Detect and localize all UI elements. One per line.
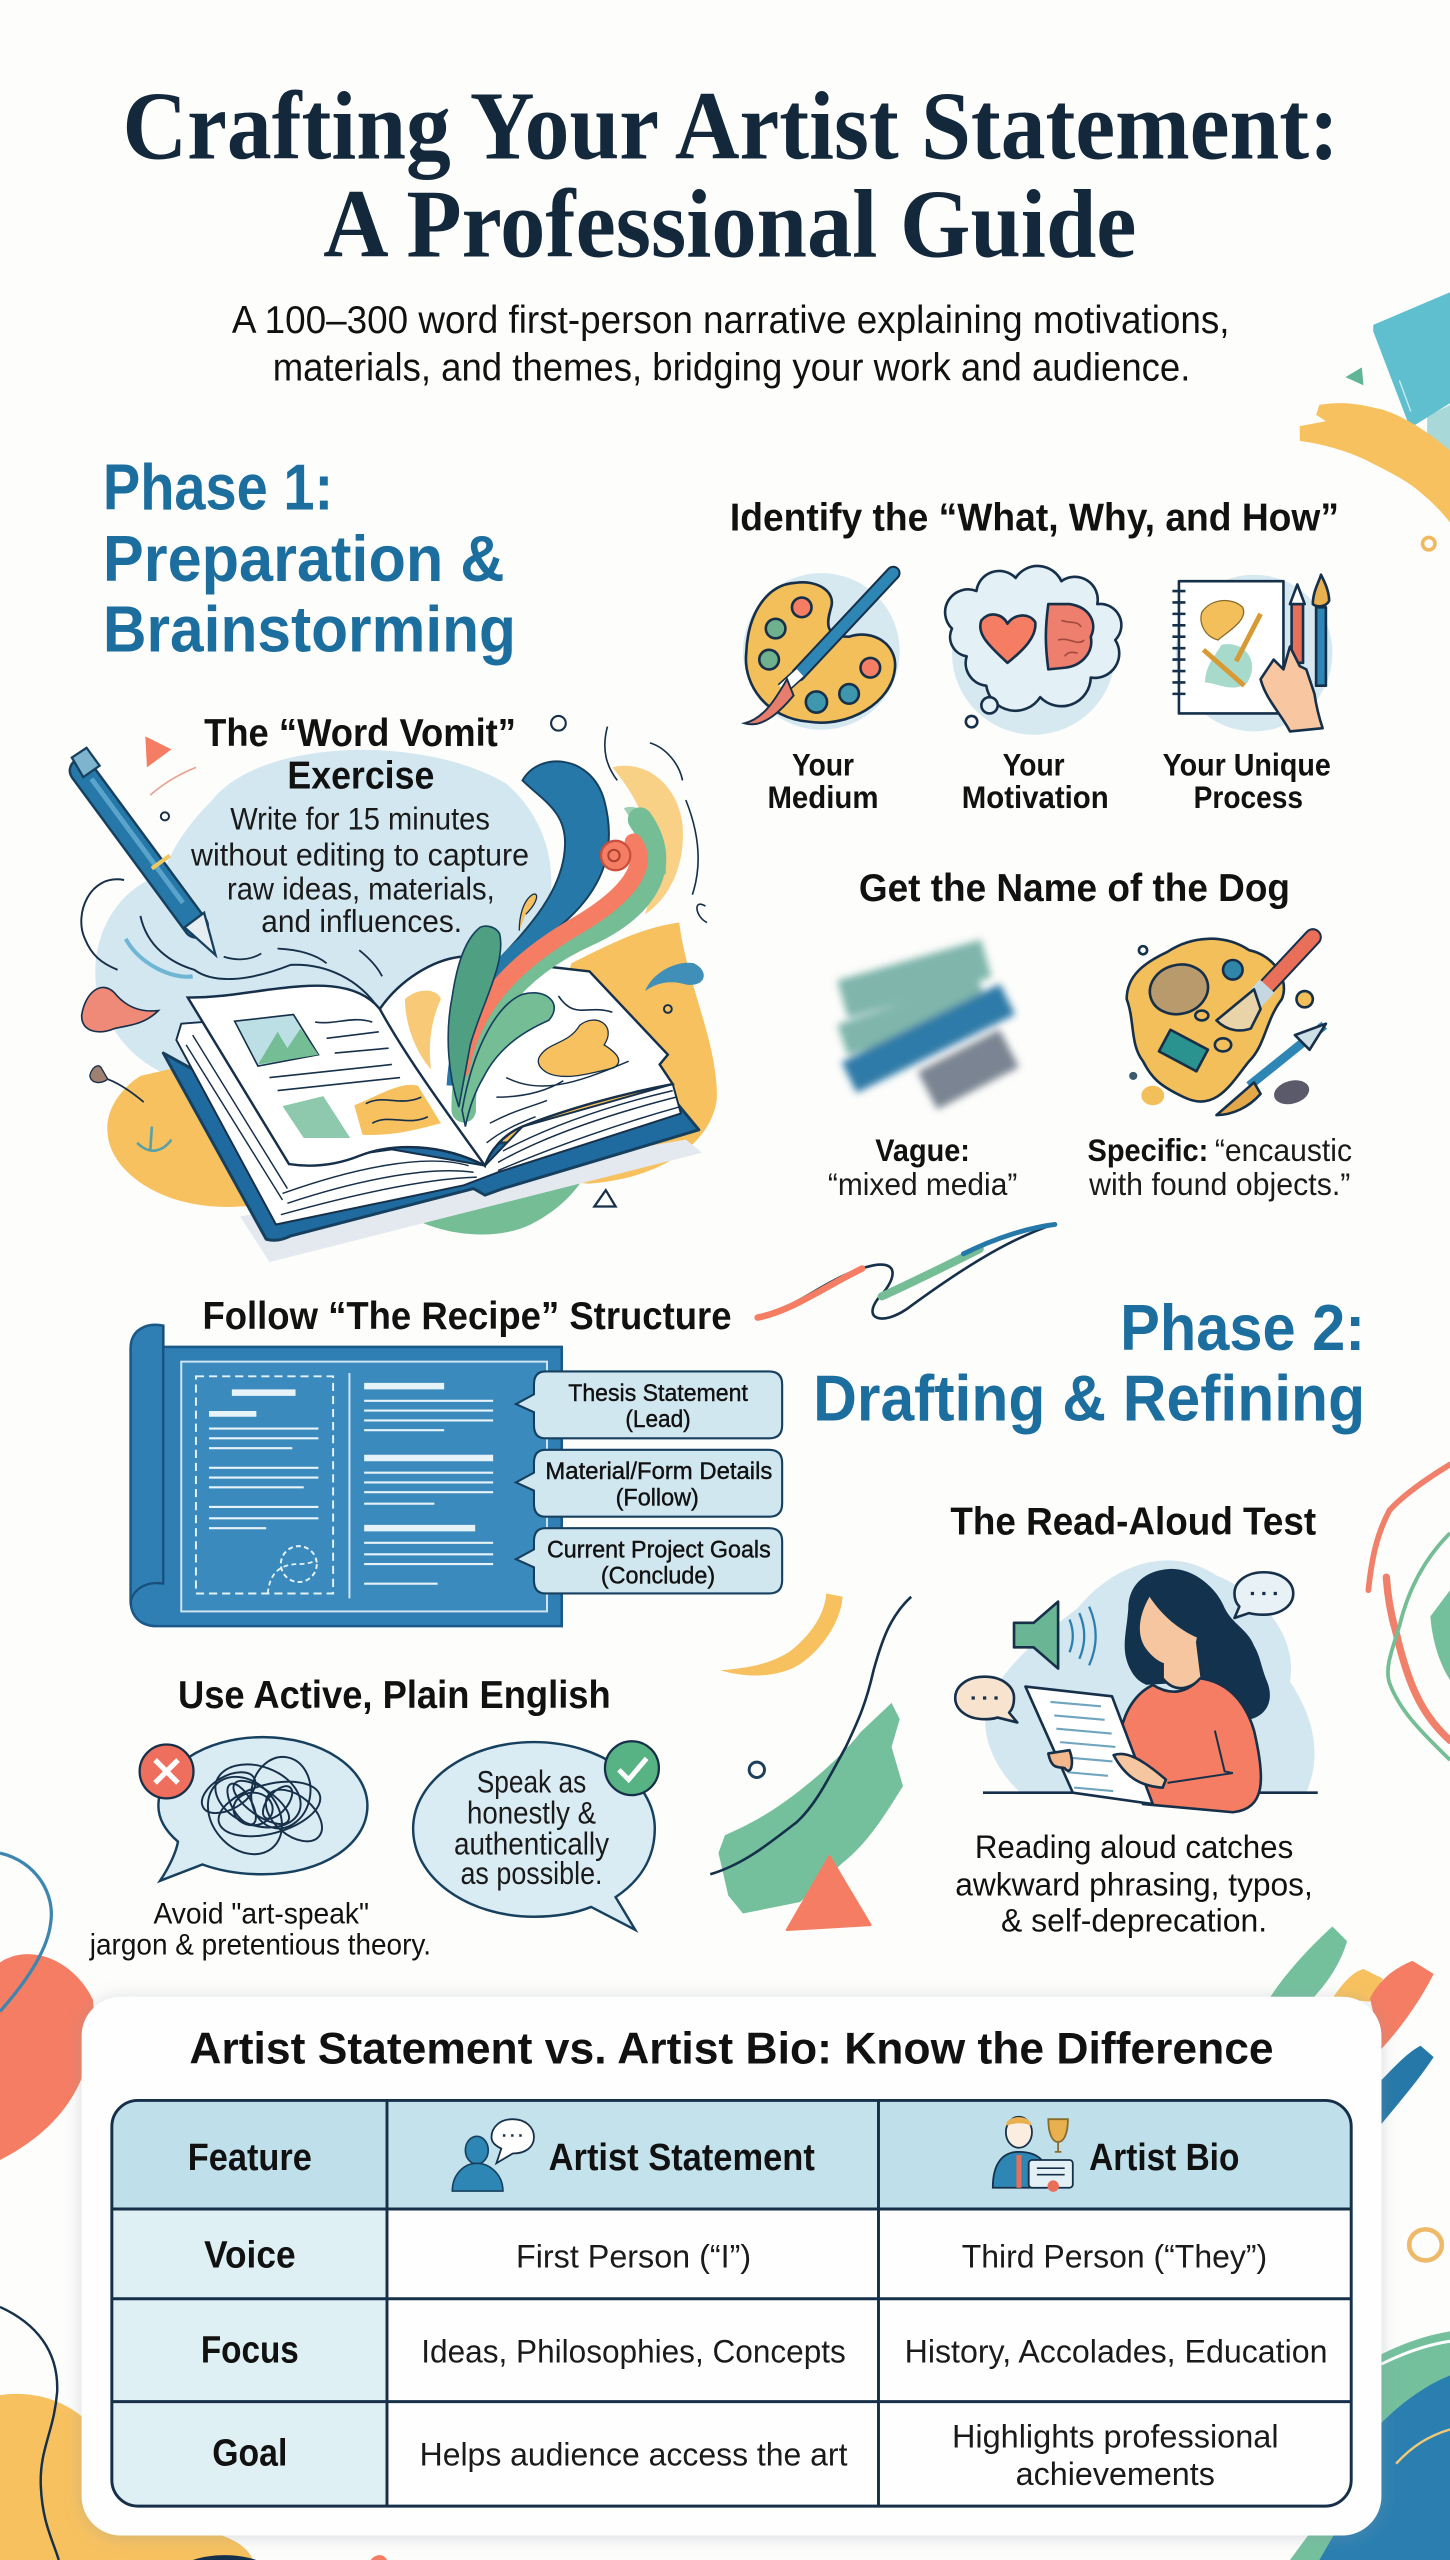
text block: exercise description: raw ideas, materials, — [227, 872, 495, 907]
icon: vague paint smear — [843, 958, 1009, 1091]
heading: Use Active, Plain English — [178, 1674, 611, 1717]
icon: green check — [605, 1741, 659, 1795]
panel: what why how — [730, 497, 1339, 815]
label: your medium — [767, 748, 878, 815]
panel: follow the recipe structure — [131, 1295, 782, 1626]
row: voice: First Person (“I”) — [516, 2238, 751, 2275]
heading: Exercise: Exercise — [287, 755, 434, 798]
icon: palette and brush — [743, 573, 900, 730]
small marks around the pen — [81, 716, 707, 1207]
callout: current project goals: (Conclude) — [601, 1564, 715, 1590]
comparison table — [112, 2100, 1351, 2506]
label: specific: “encaustic — [1215, 1133, 1352, 1168]
title — [122, 72, 1339, 278]
panel: word vomit exercise illustration — [72, 712, 717, 1262]
card background — [82, 1997, 1381, 2536]
row: focus: Focus — [201, 2328, 299, 2370]
heading: Phase 1: Preparation & — [103, 522, 505, 595]
table header: artist statement: Artist Statement — [549, 2136, 815, 2178]
speech bubble: tangled jargon — [158, 1737, 367, 1881]
subtitle: A 100–300 word first-person narrative explaining motivations, — [232, 299, 1230, 342]
text block: exercise description: without editing to capture — [190, 837, 529, 872]
heading: Phase 2: Phase 2: — [1120, 1291, 1365, 1364]
heading: The Read-Aloud Test — [950, 1501, 1316, 1544]
callout: thesis statement: Thesis Statement — [568, 1381, 748, 1407]
heading: Phase 2 — [813, 1291, 1365, 1434]
icon: thought bubble — [945, 566, 1121, 735]
caption: avoid art speak — [89, 1897, 431, 1961]
callout: current project goals — [516, 1528, 782, 1593]
heading: Get the Name of the Dog — [859, 867, 1290, 910]
title: Crafting Your Artist Statement: — [122, 72, 1339, 180]
heading: Word Vomit: The “Word Vomit” — [204, 712, 516, 755]
row: goal: achievements — [1016, 2455, 1215, 2492]
panel: statement vs bio comparison — [82, 1997, 1381, 2536]
speech bubble: speak honestly: honestly & — [467, 1796, 596, 1831]
heading: Phase 1: Brainstorming — [103, 592, 516, 665]
callout: material and form details: (Follow) — [616, 1485, 699, 1511]
subtitle: materials, and themes, bridging your work and audience. — [273, 346, 1190, 389]
label: your medium: Your — [792, 748, 854, 783]
panel: get the name of the dog — [828, 867, 1352, 1202]
icon: speech bubble right — [1234, 1572, 1293, 1618]
label: your motivation: Motivation — [962, 780, 1109, 815]
row: goal — [212, 2417, 1279, 2492]
row: focus: History, Accolades, Education — [905, 2332, 1328, 2369]
paint washes behind book — [95, 750, 717, 1262]
speech bubble: speak honestly: Speak as — [477, 1765, 586, 1800]
row: goal: Goal — [212, 2431, 287, 2473]
blueprint document — [131, 1325, 562, 1626]
callout: thesis statement — [516, 1371, 782, 1438]
row: goal: Highlights professional — [952, 2417, 1279, 2454]
label: vague: Vague: — [875, 1133, 970, 1168]
heading: Follow “The Recipe” Structure — [202, 1295, 732, 1338]
open book — [163, 957, 699, 1240]
callout: thesis statement: (Lead) — [625, 1407, 691, 1433]
text block: exercise description: and influences. — [261, 904, 462, 939]
row: voice: Third Person (“They”) — [962, 2238, 1267, 2275]
subtitle — [232, 299, 1230, 389]
callout: material and form details: Material/Form Details — [545, 1459, 772, 1485]
table header: artist bio: Artist Bio — [1089, 2136, 1239, 2178]
label: specific: Specific: — [1087, 1133, 1208, 1168]
icon: specific encaustic blob — [1127, 937, 1326, 1115]
icon: speech bubble left — [955, 1677, 1017, 1722]
text block: exercise description: Write for 15 minutes — [230, 801, 490, 836]
row: focus: Ideas, Philosophies, Concepts — [421, 2332, 846, 2369]
icon: person speaking — [452, 2119, 534, 2191]
label: specific — [1087, 1133, 1352, 1202]
text block: read aloud description: Reading aloud catches — [975, 1828, 1293, 1865]
label: your motivation: Your — [1003, 748, 1065, 783]
heading: Identify the “What, Why, and How” — [730, 497, 1339, 540]
icon: speaker with sound waves — [1014, 1602, 1096, 1669]
callout: material and form details — [516, 1450, 782, 1517]
row: voice — [204, 2234, 1267, 2276]
text block: read aloud description — [955, 1828, 1313, 1938]
icon: pen — [72, 748, 216, 955]
label: vague — [828, 1133, 1017, 1202]
label: your unique process: Your Unique — [1163, 748, 1331, 783]
text block: read aloud description: awkward phrasing, typos, — [955, 1866, 1313, 1903]
label: vague: “mixed media” — [828, 1167, 1017, 1202]
icon: red cross — [140, 1744, 193, 1798]
caption: avoid art speak: jargon & pretentious theory. — [89, 1928, 431, 1961]
panel: read aloud test — [950, 1501, 1318, 1938]
title: A Professional Guide — [323, 170, 1136, 278]
panel: use active plain english — [89, 1674, 659, 1961]
icon: person with trophy and certificate — [993, 2117, 1073, 2192]
heading: Phase 2: Drafting & Refining — [813, 1361, 1365, 1434]
label: specific: with found objects.” — [1088, 1167, 1350, 1202]
heading: Phase 1: Phase 1: — [103, 450, 333, 523]
label: your medium: Medium — [767, 780, 878, 815]
heading: Artist Statement vs. Artist Bio: Know the Difference — [189, 2025, 1274, 2074]
label: your motivation — [962, 748, 1109, 815]
speech bubble: speak honestly: as possible. — [460, 1856, 603, 1891]
speech bubble: speak honestly — [413, 1742, 655, 1930]
label: your unique process: Process — [1194, 780, 1303, 815]
right page — [380, 957, 673, 1166]
text block: read aloud description: & self-deprecation. — [1001, 1901, 1267, 1938]
caption: avoid art speak: Avoid "art-speak" — [153, 1897, 369, 1930]
row: voice: Voice — [204, 2234, 296, 2276]
label: your unique process — [1163, 748, 1331, 815]
text block: exercise description — [190, 801, 529, 939]
heading: Phase 1 — [103, 450, 516, 665]
row: goal: Helps audience access the art — [420, 2435, 847, 2472]
illustration: woman reading aloud — [983, 1560, 1318, 1812]
row: focus — [201, 2328, 1328, 2370]
left page — [188, 986, 485, 1166]
paint swirls rising from the book — [448, 727, 698, 1127]
speech bubble: speak honestly: authentically — [454, 1827, 610, 1862]
icon: sketchbook and hand — [1172, 575, 1332, 731]
table header: feature: Feature — [188, 2136, 312, 2178]
callout: current project goals: Current Project Goals — [547, 1538, 771, 1564]
